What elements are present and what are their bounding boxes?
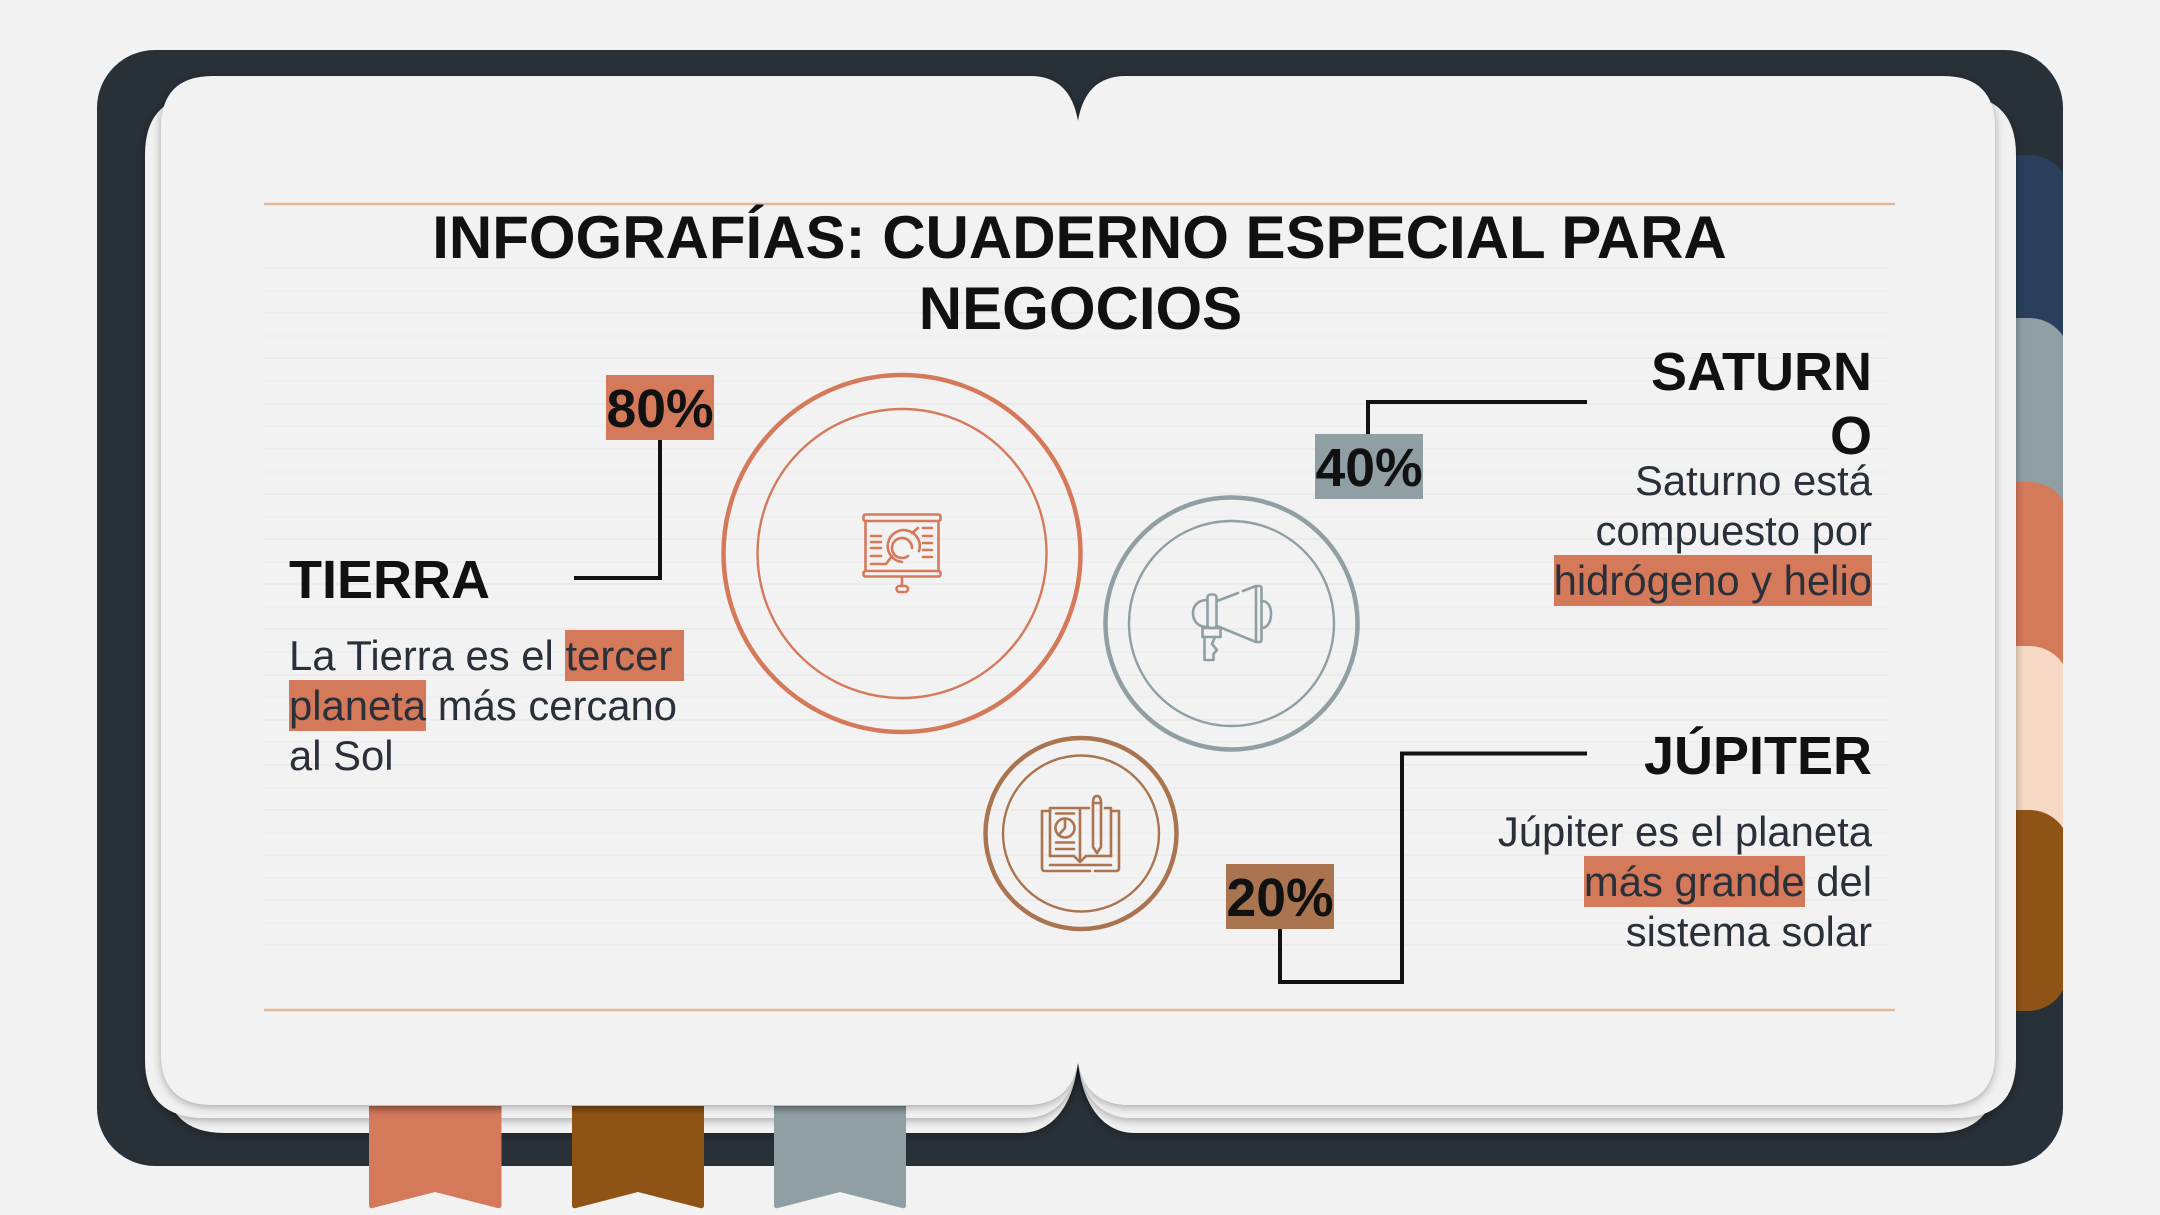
text block: Tierra: La Tierra es el tercer [289, 632, 672, 679]
circle: coral 80% [724, 375, 1080, 732]
icon: megaphone [1193, 586, 1271, 660]
heading: Saturno: O [1830, 406, 1872, 466]
text block: Saturno: Saturno está [1635, 457, 1872, 504]
badge: 20%: 20% [1226, 869, 1334, 928]
text block: Tierra: planeta más cercano [289, 682, 677, 729]
connector: Júpiter to 20% [1280, 754, 1587, 982]
connector: Tierra to 80% [574, 438, 660, 578]
text block: Saturno: compuesto por [1596, 507, 1872, 554]
middle page stack [145, 95, 2016, 1118]
title: NEGOCIOS [919, 275, 1242, 342]
title: INFOGRAFÍAS: CUADERNO ESPECIAL PARA [432, 204, 1727, 271]
circle: brown 20% [986, 738, 1176, 929]
title [432, 204, 1727, 342]
badge: 80%: 80% [606, 380, 714, 439]
open notebook top pages [161, 76, 1995, 1105]
connector: Saturno to 40% [1368, 402, 1587, 436]
text block: Júpiter: sistema solar [1626, 908, 1872, 955]
bookmark ribbons [369, 1106, 906, 1208]
text block: Júpiter: más grande del [1584, 858, 1872, 905]
heading: Saturno: SATURN [1651, 342, 1872, 402]
circle: gray 40% [1106, 498, 1358, 750]
index tabs [2016, 155, 2063, 1011]
heading: Tierra: TIERRA [289, 550, 490, 610]
back page stack [165, 105, 1996, 1133]
text block: Saturno: hidrógeno y helio [1554, 557, 1872, 604]
text block: Saturno [1554, 457, 1872, 606]
text block: Tierra [289, 630, 684, 779]
heading: Júpiter: JÚPITER [1644, 726, 1872, 786]
icon: open book with pen [1042, 796, 1119, 871]
heading: Saturno [1651, 342, 1872, 466]
text block: Júpiter: Júpiter es el planeta [1498, 808, 1872, 855]
badge: 40%: 40% [1315, 439, 1423, 498]
text block: Tierra: al Sol [289, 732, 394, 779]
icon: presentation board [864, 514, 940, 592]
